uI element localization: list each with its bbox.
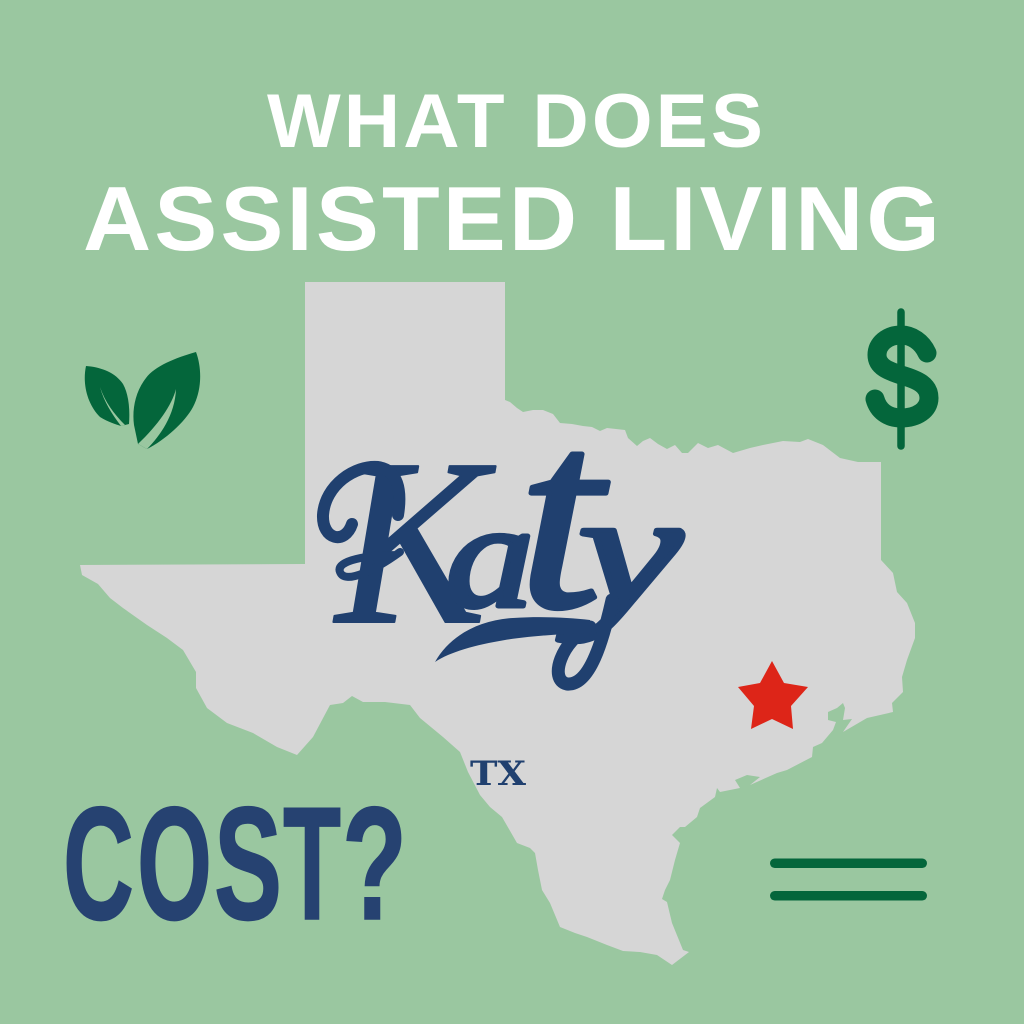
heading: cost: C (63, 774, 134, 954)
script wordmark: Katy: K (333, 411, 496, 674)
heading: cost: O (137, 774, 212, 954)
title: WHAT DOES (267, 79, 766, 164)
star: Katy location (738, 661, 808, 729)
heading: cost: T (283, 774, 341, 954)
script wordmark: Katy: t (518, 366, 612, 665)
heading: cost: ? (342, 774, 407, 954)
heading: cost (63, 774, 407, 954)
script wordmark: Katy: y (558, 459, 683, 642)
script wordmark: Katy: a (446, 473, 534, 639)
map: Texas silhouette (80, 282, 915, 965)
icon: leaves (85, 352, 200, 449)
icon: menu lines (770, 858, 927, 900)
heading: cost: S (214, 774, 282, 954)
icon: dollar sign (875, 312, 929, 446)
state label: TX (470, 754, 527, 794)
title (83, 79, 943, 270)
wordmark swashes (323, 467, 612, 684)
title: ASSISTED LIVING (83, 169, 943, 270)
script wordmark: Katy (323, 366, 683, 684)
